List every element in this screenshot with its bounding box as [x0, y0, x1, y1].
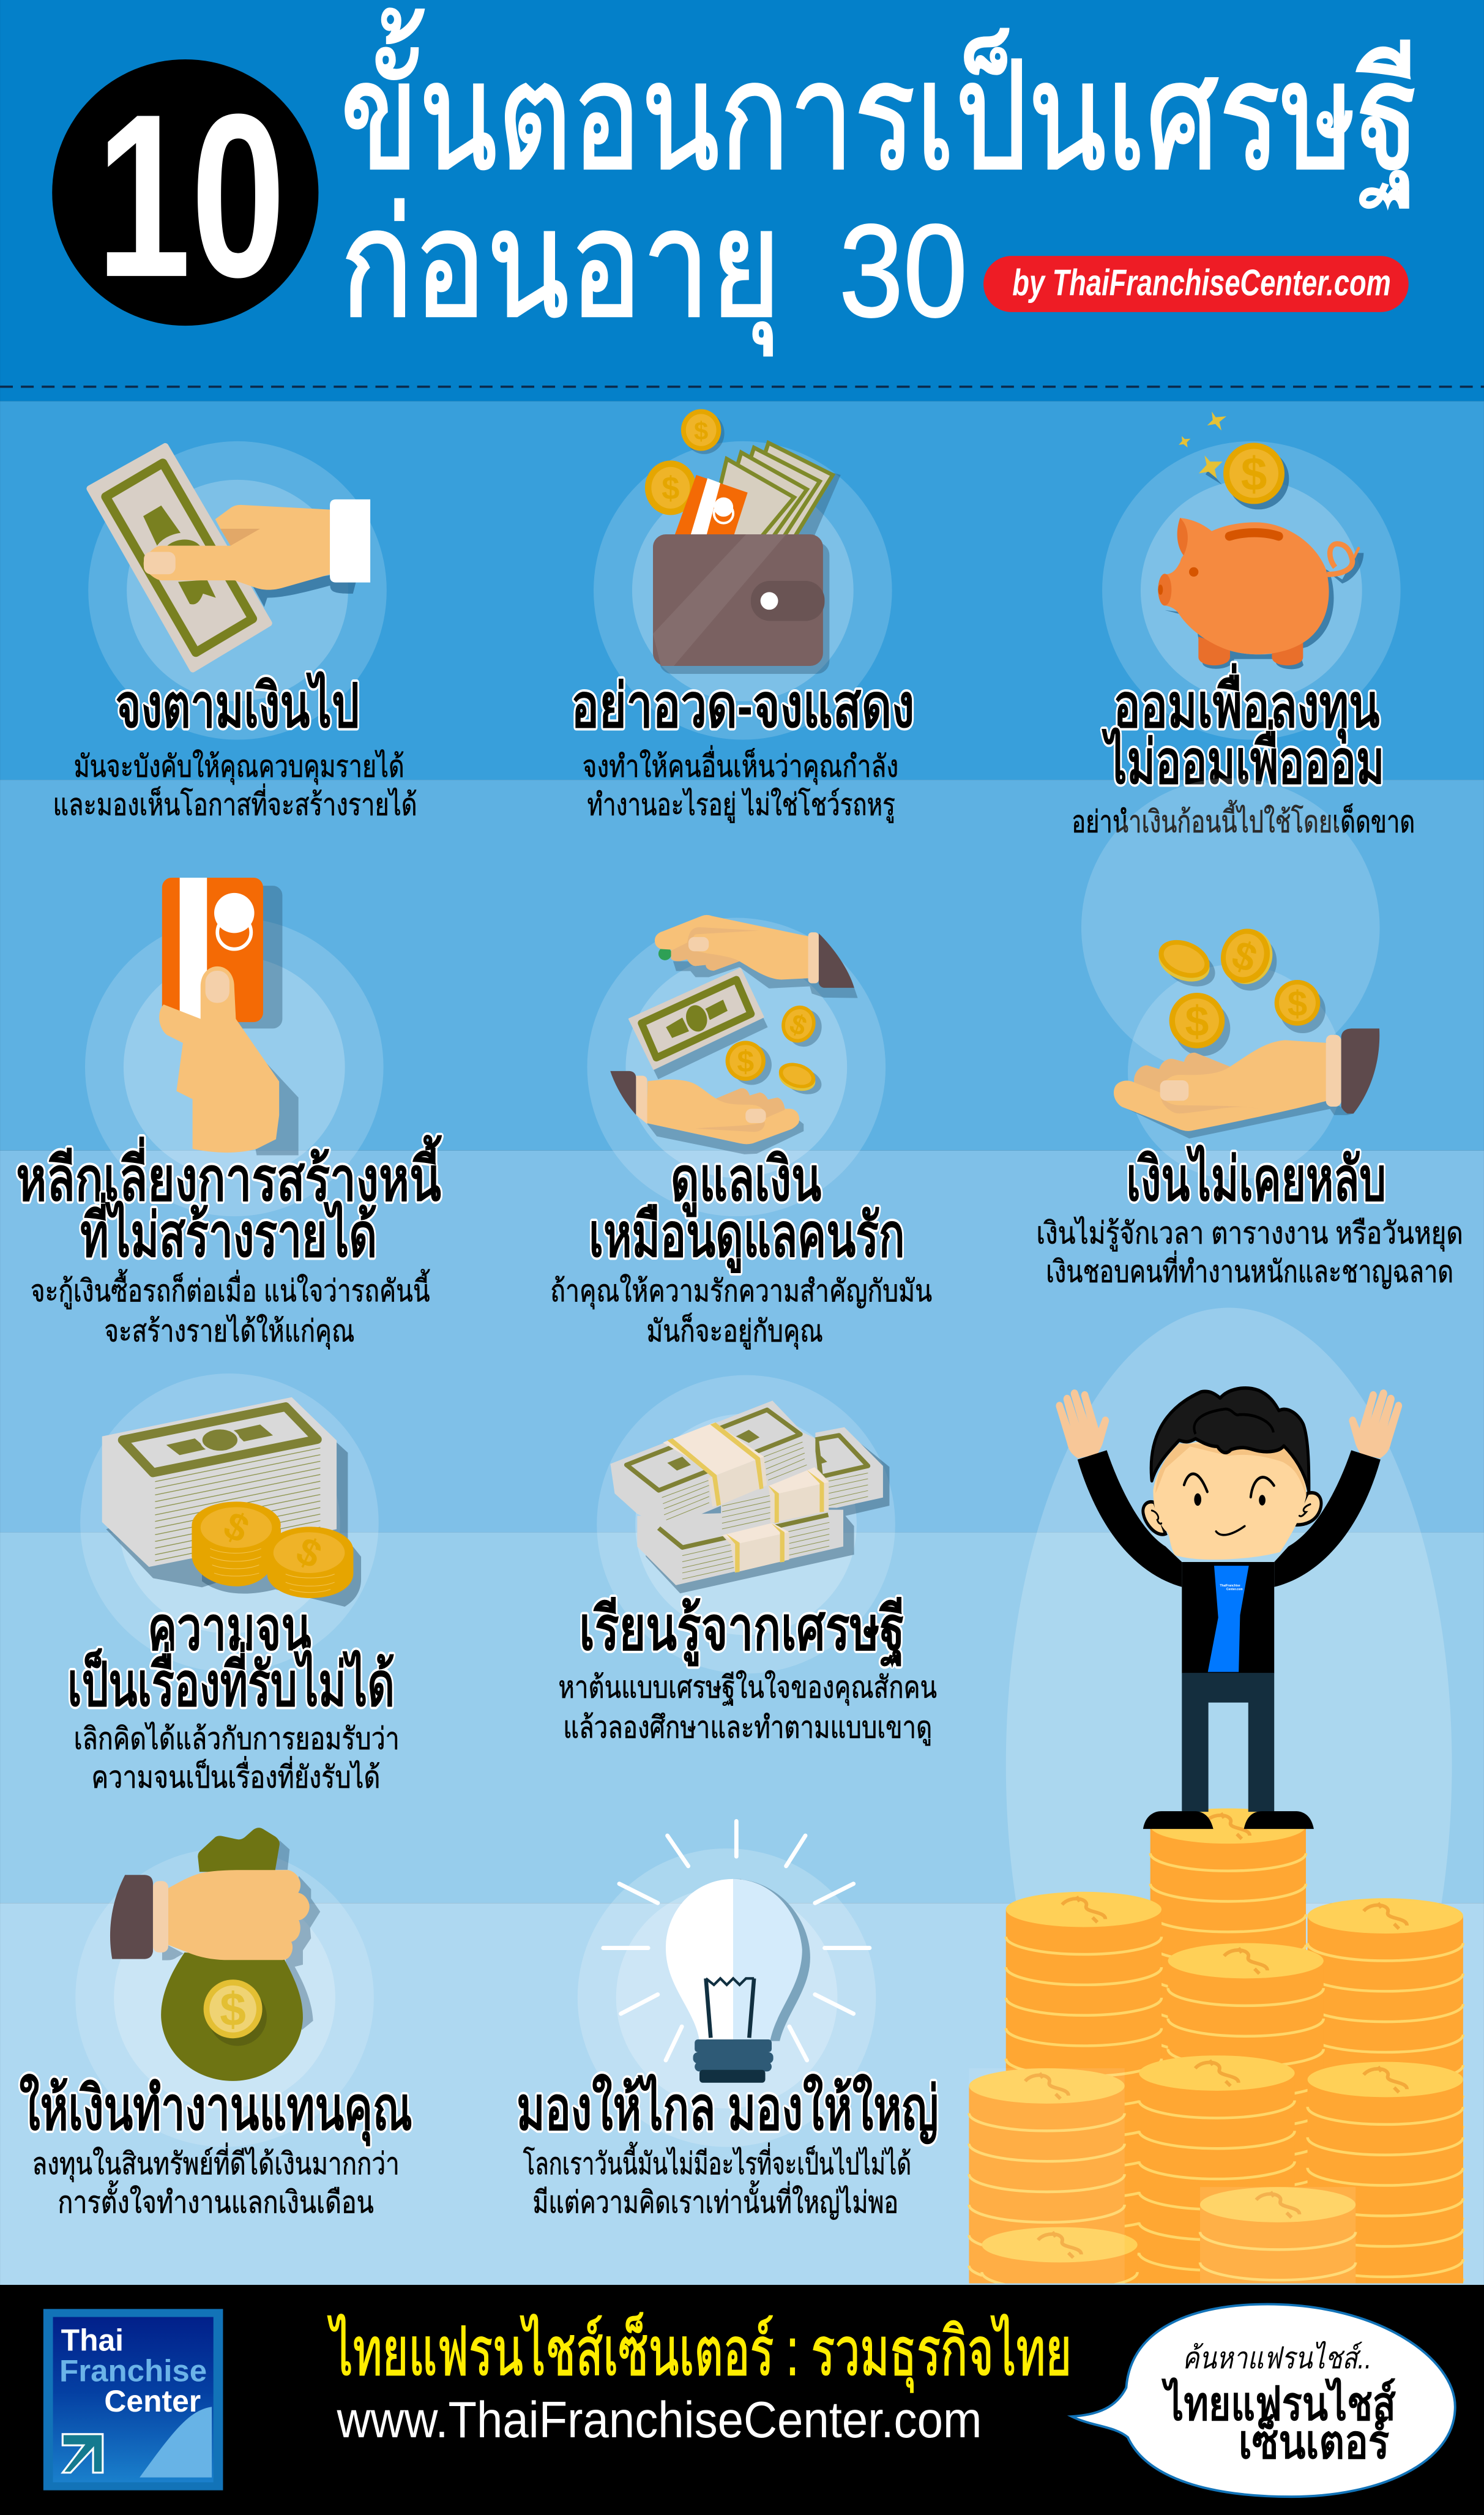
byline pill	[983, 256, 1409, 312]
icon: piggy bank with coin and stars	[1158, 411, 1363, 669]
icon: hand with credit card	[159, 878, 299, 1156]
description: และมองเห็นโอกาสที่จะสร้างรายได้	[53, 784, 417, 822]
description: มีแต่ความคิดเราเท่านั้นที่ใหญ่ไม่พอ	[532, 2180, 898, 2219]
icon: hands with banknote and coins: $	[786, 1007, 811, 1042]
title line 2: ก่อนอายุ	[340, 180, 781, 356]
icon: fist holding money bag	[110, 1828, 320, 2081]
heading	[16, 1135, 442, 1270]
heading	[67, 1595, 395, 1719]
panel: follow the money	[53, 441, 417, 822]
footer	[0, 2285, 1484, 2514]
speech bubble: เซ็นเตอร์	[1239, 2414, 1389, 2468]
panel: save to invest	[1072, 411, 1415, 839]
speech bubble	[1072, 2304, 1455, 2497]
icon: open hand with falling coins: $	[1185, 998, 1209, 1045]
header	[52, 9, 1420, 356]
icon: cash stack with coins: $	[290, 1529, 328, 1577]
logo	[43, 2309, 223, 2491]
icon: cash stack with coins: $	[217, 1504, 255, 1552]
icon: wallet with cash, card and coins: $	[662, 471, 679, 506]
description: หาต้นแบบเศรษฐีในใจของคุณสักคน	[558, 1670, 937, 1706]
description	[550, 1274, 932, 1350]
icon: hands with banknote and coins	[610, 915, 858, 1154]
description: โลกเราวันนี้มันไม่มีอะไรที่จะเป็นไปไม่ได้	[523, 2142, 911, 2181]
icon: cash stack with coins	[102, 1397, 361, 1607]
icon: hand with banknote	[90, 446, 370, 669]
icon: hands with banknote and coins: $	[737, 1045, 754, 1079]
description: มันจะบังคับให้คุณควบคุมรายได้	[74, 749, 405, 785]
heading: ให้เงินทำงานแทนคุณ	[19, 2074, 412, 2147]
panel: make money work for you	[19, 1828, 412, 2219]
description: มันก็จะอยู่กับคุณ	[647, 1314, 823, 1350]
description: การตั้งใจทำงานแลกเงินเดือน	[58, 2180, 374, 2219]
speech bubble: ค้นหาแฟรนไชส์..	[1182, 2341, 1371, 2375]
man: ThaiFranchise	[1220, 1584, 1240, 1588]
icon: open hand with falling coins: $	[1288, 984, 1307, 1023]
icon: open hand with falling coins: $	[1226, 932, 1262, 981]
heading: จงตามเงินไป	[116, 671, 359, 741]
panel: think big	[516, 1821, 939, 2219]
description: แล้วลองศึกษาและทำตามแบบเขาดู	[563, 1710, 932, 1746]
icon: wallet with cash, card and coins	[645, 409, 841, 674]
man	[1056, 1388, 1402, 1829]
slogan: ไทยแฟรนไชส์เซ็นเตอร์ : รวมธุรกิจไทย	[327, 2312, 1072, 2393]
number badge: 10: 10	[96, 65, 286, 326]
heading: หลีกเลี่ยงการสร้างหนี้	[16, 1135, 442, 1214]
panel: learn from the rich	[558, 1375, 937, 1746]
logo: Franchise	[59, 2353, 207, 2388]
illustration: man on coin stacks	[968, 1307, 1465, 2283]
heading	[1102, 663, 1384, 796]
panel: avoid bad debt	[16, 878, 442, 1350]
coin stacks	[968, 1808, 1465, 2283]
panel: don't show off	[571, 409, 914, 823]
heading: อย่าอวด-จงแสดง	[571, 673, 914, 741]
website: www.ThaiFranchiseCenter.com	[337, 2391, 982, 2448]
heading: เป็นเรื่องที่รับไม่ได้	[67, 1642, 395, 1719]
description: จะกู้เงินซื้อรถก็ต่อเมื่อ แน่ใจว่ารถคันนี้	[31, 1269, 430, 1309]
description: ถ้าคุณให้ความรักความสำคัญกับมัน	[550, 1274, 932, 1309]
heading: ความจน	[147, 1595, 311, 1663]
heading: ออมเพื่อลงทุน	[1113, 663, 1380, 744]
heading: ดูแลเงิน	[671, 1146, 821, 1217]
icon: fist holding money bag: $	[220, 1984, 246, 2036]
icon: banded cash bundles	[610, 1400, 889, 1593]
icon: open hand with falling coins	[1114, 922, 1379, 1138]
logo: Center	[104, 2384, 201, 2418]
title number: 30: 30	[839, 196, 968, 344]
description	[583, 746, 898, 823]
heading: เรียนรู้จากเศรษฐี	[579, 1595, 905, 1669]
description: ทำงานอะไรอยู่ ไม่ใช่โชว์รถหรู	[587, 788, 895, 823]
description	[31, 1269, 430, 1350]
description: ความจนเป็นเรื่องที่ยังรับได้	[91, 1756, 380, 1794]
heading: เหมือนดูแลคนรัก	[589, 1202, 905, 1274]
icon: piggy bank with coin and stars: $	[1241, 449, 1267, 501]
logo: Thai	[61, 2323, 124, 2358]
description: ลงทุนในสินทรัพย์ที่ดีได้เงินมากกว่า	[32, 2143, 400, 2182]
panel: money never sleeps	[1037, 778, 1463, 1289]
speech bubble: ไทยแฟรนไชส์	[1161, 2377, 1396, 2430]
description: เลิกคิดได้แล้วกับการยอมรับว่า	[74, 1721, 400, 1755]
description	[53, 749, 417, 822]
panel: care for money	[550, 915, 932, 1350]
heading	[589, 1146, 905, 1274]
heading: มองให้ไกล มองให้ใหญ่	[516, 2074, 939, 2145]
description: จงทำให้คนอื่นเห็นว่าคุณกำลัง	[583, 746, 898, 785]
man: Center.com	[1226, 1588, 1243, 1591]
description: จะสร้างรายได้ให้แก่คุณ	[104, 1314, 354, 1350]
description	[32, 2143, 400, 2219]
icon: light bulb	[603, 1821, 870, 2083]
description	[74, 1721, 400, 1794]
icon: wallet with cash, card and coins: $	[694, 416, 708, 445]
description	[558, 1670, 937, 1746]
panel: poverty is unacceptable	[67, 1373, 400, 1794]
heading: ที่ไม่สร้างรายได้	[80, 1192, 377, 1270]
description	[1037, 1216, 1463, 1289]
description	[523, 2142, 911, 2219]
